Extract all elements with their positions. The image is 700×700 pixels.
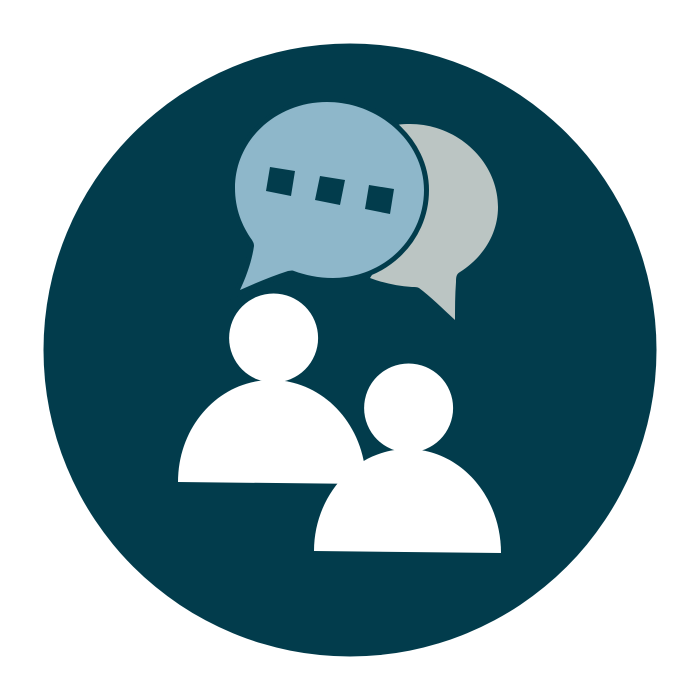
icon: right person — [314, 364, 501, 553]
icon: ellipsis square 1 — [266, 167, 295, 196]
icon: grey speech bubble — [370, 124, 498, 320]
icon: blue speech bubble — [235, 102, 424, 290]
icon: ellipsis square 3 — [365, 185, 394, 214]
icon: left person — [178, 294, 366, 484]
background circle — [44, 44, 656, 656]
icon: ellipsis square 2 — [315, 176, 345, 205]
